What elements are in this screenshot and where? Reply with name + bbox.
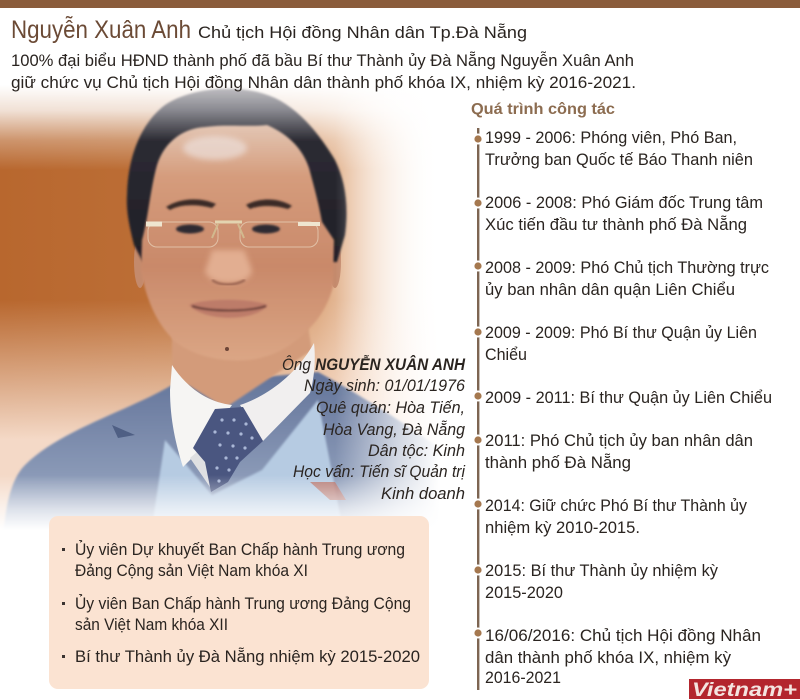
entry 2015: 2015: Bí thư Thành ủy nhiệm kỳ: [485, 562, 719, 580]
mouth: [189, 300, 268, 318]
subtitle: Chủ tịch Hội đồng Nhân dân Tp.Đà Nẵng: [198, 23, 527, 42]
photo background: [0, 85, 440, 530]
entry 2006-2008: 2006 - 2008: Phó Giám đốc Trung tâm: [485, 194, 763, 212]
entry 2009-2009: 2009 - 2009: Phó Bí thư Quận ủy Liên: [485, 324, 757, 342]
bullet 1: Ủy viên Dự khuyết Ban Chấp hành Trung ương: [75, 540, 405, 559]
timeline line: [477, 128, 479, 690]
entry 2016: 16/06/2016: Chủ tịch Hội đồng Nhân: [485, 627, 761, 645]
intro paragraph: giữ chức vụ Chủ tịch Hội đồng Nhân dân thành phố khóa IX, nhiệm kỳ 2016-2021.: [11, 74, 636, 92]
sweater: [155, 400, 338, 515]
portrait photo: [0, 87, 432, 524]
entry 2015: [472, 562, 719, 602]
shirt collar: [170, 343, 315, 490]
bottom fade: [0, 478, 430, 530]
personal details: Ngày sinh: 01/01/1976: [304, 377, 466, 395]
title: Nguyễn Xuân Anh: [11, 15, 191, 44]
personal details: Hòa Vang, Đà Nẵng: [323, 420, 466, 439]
entry 2014: nhiệm kỳ 2010-2015.: [485, 519, 640, 537]
necktie: [193, 407, 263, 492]
intro paragraph: 100% đại biểu HĐND thành phố đã bầu Bí thư Thành ủy Đà Nẵng Nguyễn Xuân Anh: [11, 51, 634, 70]
nostril shadow: [212, 280, 245, 284]
entry 2009-2009: [472, 324, 757, 364]
personal details: Ông NGUYỄN XUÂN ANH: [282, 355, 466, 374]
hair: [127, 89, 347, 262]
entry 2008-2009: [472, 259, 769, 299]
panel: party positions: [49, 516, 429, 689]
bullet 1: [62, 540, 405, 580]
timeline: [472, 128, 772, 690]
face: [141, 125, 334, 360]
entry 2014: 2014: Giữ chức Phó Bí thư Thành ủy: [485, 497, 748, 515]
entry 2008-2009: 2008 - 2009: Phó Chủ tịch Thường trực: [485, 259, 769, 277]
eyes: [176, 224, 280, 234]
entry 2016: 2016-2021: [485, 669, 561, 687]
chin dimple: [225, 347, 229, 351]
eyebrows: [166, 199, 292, 210]
entry 2011: [472, 432, 753, 472]
entry 2006-2008: [472, 194, 763, 234]
entry 2008-2009: ủy ban nhân dân quận Liên Chiểu: [485, 281, 735, 299]
jacket: [5, 370, 432, 524]
entry 2016: [472, 627, 761, 687]
personal details: Dân tộc: Kinh: [368, 442, 465, 460]
entry 2006-2008: Xúc tiến đầu tư thành phố Đà Nẵng: [485, 215, 747, 234]
top bar: [0, 0, 800, 8]
entry 1999-2006: [472, 129, 753, 169]
entry 2015: 2015-2020: [485, 584, 563, 602]
bullet 1: Đảng Cộng sản Việt Nam khóa XI: [75, 562, 308, 580]
intro paragraph: [11, 51, 636, 92]
personal details: Học vấn: Tiến sĩ Quản trị: [293, 463, 466, 481]
personal details: [282, 355, 466, 503]
entry 2011: thành phố Đà Nẵng: [485, 453, 631, 472]
entry 2011: 2011: Phó Chủ tịch ủy ban nhân dân: [485, 432, 753, 450]
personal details: Kinh doanh: [381, 485, 465, 503]
entry 2009-2009: Chiểu: [485, 346, 527, 364]
bullet 3: Bí thư Thành ủy Đà Nẵng nhiệm kỳ 2015-2020: [75, 647, 420, 666]
personal details: Quê quán: Hòa Tiến,: [316, 399, 465, 417]
lapel pin: [310, 482, 346, 500]
cover right: [440, 447, 470, 524]
entry 2014: [472, 497, 748, 537]
bullet 2: [62, 594, 411, 634]
right fade: [338, 117, 440, 524]
timeline heading: Quá trình công tác: [471, 101, 615, 118]
rimless glasses: [146, 222, 320, 247]
neck: [172, 330, 312, 405]
nose: [205, 250, 252, 283]
entry 2009-2011: 2009 - 2011: Bí thư Quận ủy Liên Chiểu: [485, 389, 772, 407]
bullet 2: sản Việt Nam khóa XII: [75, 616, 228, 634]
bullet 2: Ủy viên Ban Chấp hành Trung ương Đảng Cộng: [75, 594, 411, 613]
forehead highlight: [183, 136, 247, 160]
ears: [134, 246, 341, 288]
entry 1999-2006: Trưởng ban Quốc tế Báo Thanh niên: [485, 151, 753, 169]
entry 1999-2006: 1999 - 2006: Phóng viên, Phó Ban,: [485, 129, 737, 147]
entry 2016: dân thành phố khóa IX, nhiệm kỳ: [485, 649, 732, 667]
